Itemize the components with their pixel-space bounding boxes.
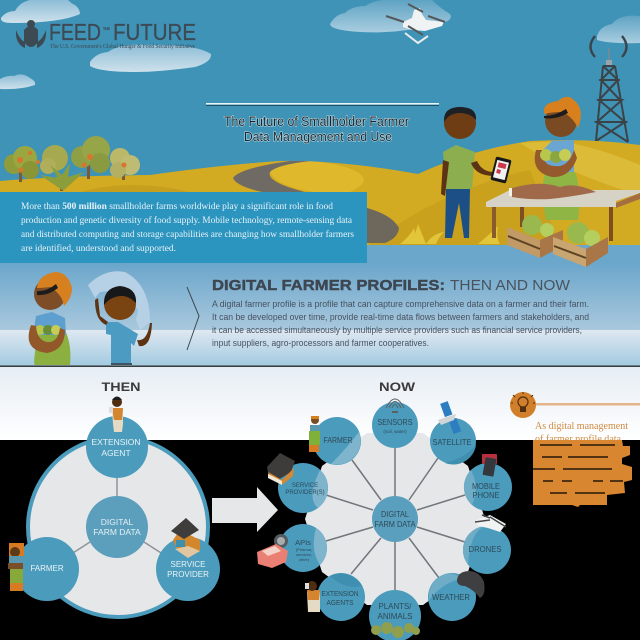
node: service provider xyxy=(156,537,220,601)
intro text: production and genetic diversity of food supply. Mobile technology, remote-sensing data xyxy=(21,215,353,226)
road xyxy=(233,161,310,192)
node: digital farm data xyxy=(86,496,148,558)
node: digital farm data: DIGITAL xyxy=(101,517,133,527)
section heading: DIGITAL FARMER PROFILES: xyxy=(212,277,445,294)
farmer man with phone xyxy=(441,107,512,238)
node: digital farm data: FARM DATA xyxy=(93,527,141,537)
icon: stacked books xyxy=(267,453,295,485)
section body text: A digital farmer profile is a profile that can capture comprehensive data on a farmer and their farm. xyxy=(212,299,589,309)
node: farmer xyxy=(313,417,361,465)
node: mobile phone: PHONE xyxy=(472,491,500,500)
section body text: It can be developed over time, provide real-time data flows between farmers and stakeholders, and xyxy=(212,312,589,322)
crates of cabbage xyxy=(507,215,608,267)
icon: satellite xyxy=(438,401,461,434)
icon: drone small xyxy=(475,515,506,532)
node: farmer: FARMER xyxy=(30,564,64,573)
title xyxy=(224,114,409,144)
title: Data Management and Use xyxy=(244,129,392,144)
section body text xyxy=(212,299,589,348)
white panel xyxy=(0,367,640,440)
node: mobile phone xyxy=(464,463,512,511)
farmer woman portrait xyxy=(29,272,72,365)
icon: house xyxy=(171,518,200,558)
intro text: and distributed computing and storage capabilities are changing how smallholder farmers xyxy=(21,229,354,240)
node: plants and animals: PLANTS/ xyxy=(378,602,412,611)
node: sensors: (soil, water) xyxy=(383,429,407,434)
node: weather: WEATHER xyxy=(432,593,470,602)
node: satellite xyxy=(430,418,476,465)
icon: wifi sensor xyxy=(386,399,404,412)
logo wordmark: FUTURE xyxy=(113,19,196,45)
node: satellite: SATELLITE xyxy=(432,438,472,447)
node: weather xyxy=(428,573,476,621)
sky background xyxy=(0,0,640,245)
then diagram xyxy=(8,396,220,617)
black lower area xyxy=(0,440,640,640)
chevron arrow xyxy=(187,287,199,350)
icon: weather cloud xyxy=(457,571,484,598)
title rule xyxy=(206,103,439,106)
trees xyxy=(4,136,140,191)
node: service provider: PROVIDER xyxy=(167,570,209,579)
node: service provider: SERVICE xyxy=(171,560,205,569)
farmer woman with produce xyxy=(535,97,581,220)
node: extension agent: EXTENSION xyxy=(91,437,141,447)
node: drones: DRONES xyxy=(468,545,502,554)
node: digital farm data: DIGITAL xyxy=(381,510,409,519)
title: The Future of Smallholder Farmer xyxy=(224,114,409,129)
icon: light bulb xyxy=(510,392,536,418)
now diagram xyxy=(257,399,512,640)
hills xyxy=(0,140,640,245)
intro text xyxy=(21,201,354,254)
icon: cell tower xyxy=(590,36,628,142)
logo wordmark xyxy=(49,19,196,45)
callout xyxy=(510,392,640,507)
section body text: input suppliers, agro-processors and farmer cooperatives. xyxy=(212,338,429,348)
node: apis: other) xyxy=(299,557,310,562)
node: sensors xyxy=(372,402,418,448)
node: sensors: SENSORS xyxy=(378,418,412,427)
node: apis: APIs xyxy=(295,538,311,547)
icon: pharmacy shop xyxy=(257,534,288,568)
node: extension agent xyxy=(86,416,148,478)
clouds xyxy=(0,0,640,89)
node: farmer: FARMER xyxy=(324,436,353,445)
node: service providers: SERVICE xyxy=(292,483,318,489)
icon: mobile phone xyxy=(482,454,497,477)
grass xyxy=(400,224,500,244)
logo: Feed the Future xyxy=(16,19,196,50)
callout: of farmer profile data xyxy=(535,434,621,445)
node: plants and animals: ANIMALS xyxy=(378,612,412,621)
road lower section xyxy=(367,208,399,243)
node: extension agents: EXTENSION xyxy=(322,589,358,598)
node: apis xyxy=(279,524,327,572)
icon: tablet xyxy=(490,156,512,184)
icon: farmer figure xyxy=(8,543,24,591)
node: extension agent: AGENT xyxy=(101,448,131,458)
logo wordmark: THE xyxy=(103,26,110,31)
intro text: are identified, understood and supported. xyxy=(21,243,176,254)
intro panel xyxy=(0,192,367,263)
icon: extension agent figure xyxy=(109,396,123,432)
table with yams xyxy=(486,184,640,241)
node: digital farm data: FARM DATA xyxy=(374,520,416,529)
icon: extension agent small xyxy=(305,581,320,612)
logo tagline: The U.S. Government's Global Hunger & Food Security Initiative xyxy=(50,44,195,50)
now heading: NOW xyxy=(379,380,416,394)
intro text: More than 500 million smallholder farms worldwide play a significant role in food xyxy=(21,201,333,212)
logo wordmark: FEED xyxy=(49,19,101,45)
callout obscured text block xyxy=(533,440,632,507)
icon: seal xyxy=(16,20,46,48)
icon: farmer small xyxy=(309,416,320,452)
node: service providers xyxy=(278,463,328,513)
node: apis: (Pharma, xyxy=(296,547,312,552)
icon: drone xyxy=(386,4,445,43)
section band: digital farmer profiles xyxy=(0,244,640,366)
then heading: THEN xyxy=(102,380,140,394)
node: service providers: PROVIDER(S) xyxy=(285,490,325,496)
section heading: THEN AND NOW xyxy=(450,278,570,294)
node: drones xyxy=(463,526,511,574)
farmer man with cloud xyxy=(88,271,152,365)
node: mobile phone: MOBILE xyxy=(472,482,500,491)
node: extension agents xyxy=(317,573,365,621)
spokes xyxy=(326,446,465,590)
node: farmer xyxy=(15,537,79,601)
arrow then to now xyxy=(212,487,278,532)
node: digital farm data xyxy=(372,496,418,542)
node: apis: services, xyxy=(296,552,312,557)
icon: plants xyxy=(371,622,420,638)
section body text: it can be accessed simultaneously by multiple service providers such as financial service providers, xyxy=(212,325,582,335)
node: plants and animals xyxy=(369,590,421,640)
callout text: As digital management xyxy=(535,421,628,432)
node: extension agents: AGENTS xyxy=(326,598,354,607)
